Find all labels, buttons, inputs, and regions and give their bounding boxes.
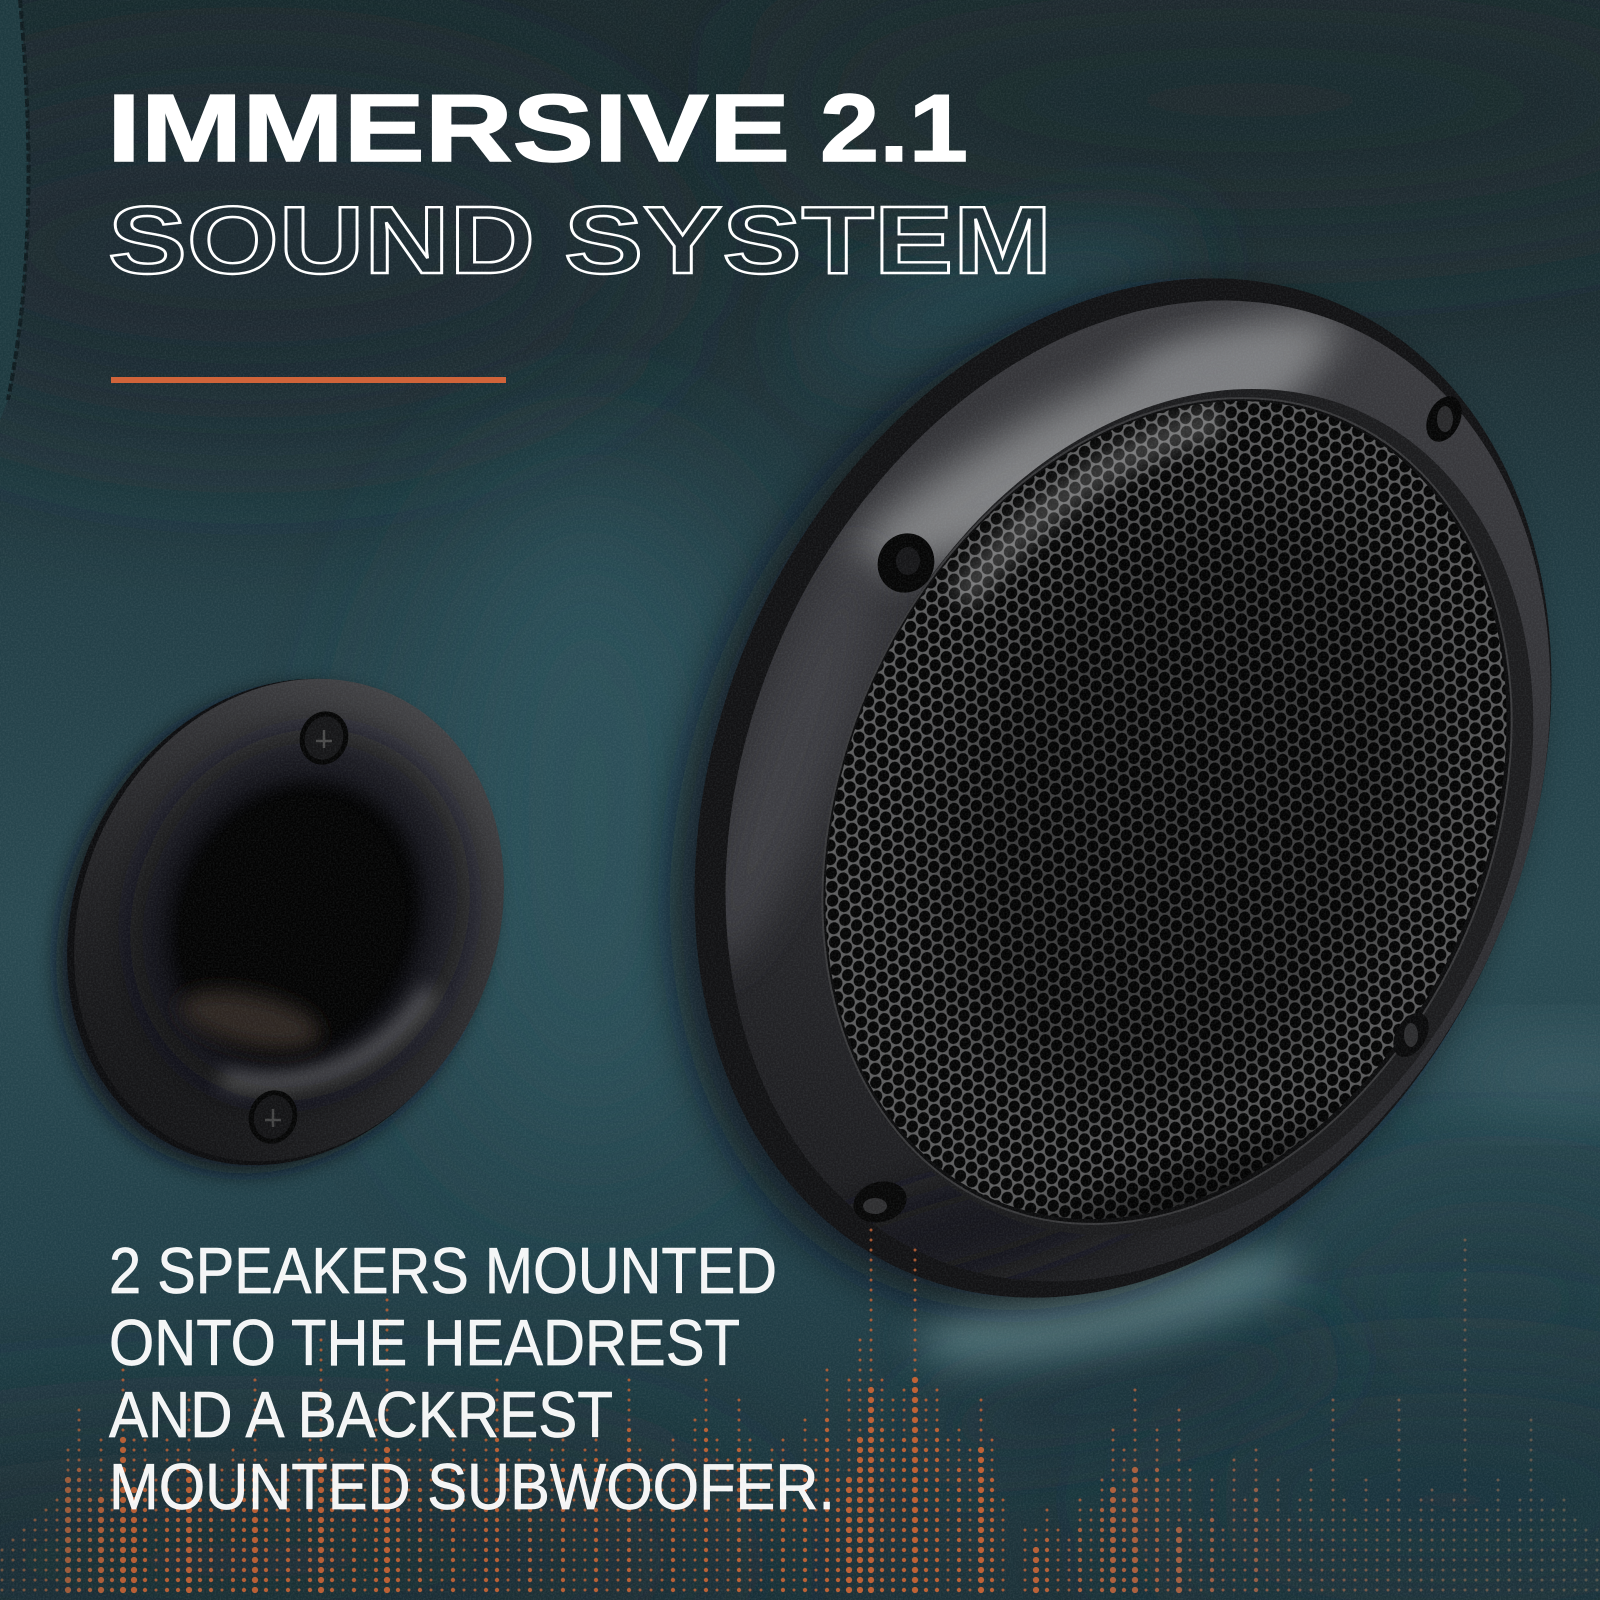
medium dots, lower rows	[79, 1420, 1256, 1600]
subtitle: SOUND SYSTEM: SOUND	[108, 187, 535, 294]
title: IMMERSIVE 2.1: IMMERSIVE	[107, 75, 790, 182]
subtitle: SOUND SYSTEM: SYSTEM	[564, 187, 1052, 294]
subtitle: SOUND SYSTEM	[108, 187, 1052, 294]
body text: MOUNTED SUBWOOFER.	[109, 1450, 835, 1523]
title: IMMERSIVE 2.1: 2.1	[820, 75, 968, 182]
speaker mounting hole lower right	[1386, 1007, 1436, 1063]
subwoofer edge	[0, 607, 579, 1237]
icon: large speaker	[648, 274, 1552, 1334]
subwoofer lower cone	[174, 980, 326, 1060]
speaker mounting hole upper left	[868, 524, 944, 602]
large dots, feature columns	[68, 1380, 1179, 1600]
icon: subwoofer port	[46, 676, 504, 1184]
body text	[109, 1234, 835, 1523]
seat seam on left edge	[0, 0, 29, 420]
speaker inner bevel	[689, 272, 1600, 1352]
speaker mounting hole lower left	[849, 1176, 911, 1228]
speaker mounting hole upper right	[1419, 390, 1469, 448]
body text: AND A BACKREST	[109, 1378, 613, 1451]
subwoofer screw top	[292, 704, 356, 772]
orange divider	[111, 377, 506, 383]
body text: 2 SPEAKERS MOUNTED	[109, 1234, 777, 1307]
speaker outer edge	[534, 137, 1600, 1439]
speaker drop shadow	[509, 148, 1600, 1452]
subwoofer screw bottom	[241, 1083, 305, 1151]
title: IMMERSIVE 2.1	[107, 75, 968, 182]
speaker grille mesh	[825, 401, 1506, 1219]
orange halftone sound wave	[2, 1230, 1597, 1600]
subwoofer flange	[74, 678, 504, 1161]
body text: ONTO THE HEADREST	[109, 1306, 740, 1379]
small dots, all columns	[2, 1230, 1597, 1600]
subwoofer drop shadow	[0, 615, 570, 1245]
speaker rim	[726, 300, 1550, 1282]
subwoofer opening	[166, 776, 427, 1066]
